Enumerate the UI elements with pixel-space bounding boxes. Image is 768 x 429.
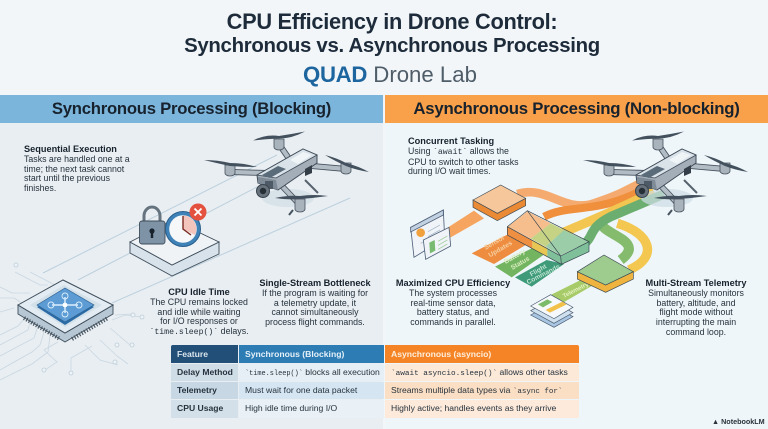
text: sequential execution: start until the previous [24, 173, 110, 183]
row: telemetry: Streams multiple data types via `async for` [391, 385, 562, 396]
text: maximized CPU efficiency: real-time sensor data, [410, 298, 496, 308]
text: single-stream bottleneck: If the program is waiting for [262, 288, 368, 298]
label: sensor updates: Updates [487, 240, 514, 259]
label: sensor updates [472, 234, 526, 264]
text: concurrent tasking: Using `await` allows the [408, 146, 509, 157]
icon: app windows [411, 210, 451, 259]
row: CPU usage: Highly active; handles events as they arrive [391, 403, 556, 413]
text: maximized CPU efficiency: commands in parallel. [410, 317, 496, 327]
icon: upper processing block [473, 185, 526, 221]
logo: QUAD Drone Lab: QUAD Drone Lab [303, 62, 477, 87]
panel: asynchronous processing [385, 95, 768, 429]
heading: synchronous [0, 95, 383, 123]
row: telemetry: Telemetry [177, 385, 217, 395]
icon: platform with lock and clock [130, 204, 219, 276]
text: maximized CPU efficiency: Maximized CPU Efficiency [396, 278, 510, 288]
title: CPU Efficiency in Drone Control: [227, 9, 557, 34]
text: multi-stream telemetry: flight mode without [659, 307, 733, 317]
text: single-stream bottleneck: cannot simultaneously [271, 307, 359, 317]
row: delay method: Delay Method [177, 367, 233, 377]
panel: synchronous processing [0, 95, 383, 429]
text: multi-stream telemetry: Simultaneously monitors [648, 288, 744, 298]
icon: central processing block [507, 211, 589, 264]
comparison table [171, 345, 579, 418]
text: concurrent tasking: during I/O wait times. [408, 166, 491, 176]
text: single-stream bottleneck: process flight commands. [265, 317, 365, 327]
text: CPU idle time: and idle while waiting [157, 307, 241, 317]
label: flight commands: Flight [529, 263, 549, 278]
row: CPU usage: CPU Usage [177, 403, 223, 413]
label: sensor updates: Sensor [483, 234, 507, 252]
text: maximized CPU efficiency [396, 278, 510, 327]
text: sequential execution: finishes. [24, 183, 56, 193]
heading: synchronous: Synchronous Processing (Blocking) [52, 99, 331, 118]
icon: CPU chip [18, 280, 113, 342]
text: CPU idle time: CPU Idle Time [168, 287, 230, 297]
watermark: NotebookLM: ▲ NotebookLM [712, 417, 765, 426]
circuit traces [0, 272, 142, 380]
icon: telemetry block [577, 255, 633, 292]
text: CPU idle time [149, 287, 249, 337]
table header row: Feature [177, 349, 208, 359]
table header row [171, 345, 579, 363]
text: CPU idle time: The CPU remains locked [150, 297, 248, 307]
label: flight commands: Commands [526, 263, 561, 286]
label: flight commands [515, 260, 564, 287]
row: delay method: `time.sleep()` blocks all execution [245, 367, 380, 378]
row: CPU usage [171, 400, 579, 418]
text: maximized CPU efficiency: battery status, and [417, 307, 489, 317]
text: CPU idle time: `time.sleep()` delays. [149, 326, 249, 337]
text: concurrent tasking [408, 136, 518, 176]
heading: asynchronous [385, 95, 768, 123]
text: sequential execution [24, 144, 130, 193]
table header row: Asynchronous (asyncio) [391, 349, 491, 359]
icon: drone [583, 132, 748, 215]
text: concurrent tasking: Concurrent Tasking [408, 136, 494, 146]
text: single-stream bottleneck [259, 278, 371, 327]
row: delay method: `await asyncio.sleep()` allows other tasks [391, 367, 568, 378]
text: multi-stream telemetry [646, 278, 746, 337]
row: telemetry: Must wait for one data packet [245, 385, 357, 395]
text: sequential execution: Sequential Execution [24, 144, 117, 154]
title: Synchronous vs. Asynchronous Processing [184, 35, 600, 57]
illustration: blocking pipeline [0, 132, 369, 380]
icon: drone [204, 132, 369, 215]
stream: telemetry: Telemetry [562, 281, 590, 300]
row: telemetry [171, 382, 579, 399]
title [184, 9, 600, 57]
text: multi-stream telemetry: Multi-Stream Telemetry [646, 278, 746, 288]
text: multi-stream telemetry: interrupting the main [656, 317, 736, 327]
text: sequential execution: Tasks are handled one at a [24, 154, 130, 164]
text: maximized CPU efficiency: The system processes [409, 288, 497, 298]
text: multi-stream telemetry: command loop. [666, 327, 726, 337]
text: multi-stream telemetry: battery, altitude, and [656, 298, 736, 308]
label: battery status: Status [510, 255, 531, 272]
text: single-stream bottleneck: a telemetry update, it [274, 298, 356, 308]
text: sequential execution: time; the next task cannot [24, 164, 124, 174]
label: battery status: Battery [503, 248, 527, 266]
row: CPU usage: High idle time during I/O [245, 403, 337, 413]
heading: asynchronous: Asynchronous Processing (Non-blocking) [413, 99, 740, 118]
text: concurrent tasking: CPU to switch to other tasks [408, 157, 518, 167]
icon: document stack [531, 295, 573, 327]
table header row: Synchronous (Blocking) [245, 349, 344, 359]
stream: telemetry [547, 280, 592, 305]
illustration: concurrent streams [410, 132, 748, 328]
row: delay method [171, 364, 579, 381]
text: single-stream bottleneck: Single-Stream Bottleneck [259, 278, 371, 288]
label: battery status [495, 248, 543, 277]
text: CPU idle time: for I/O responses or [160, 316, 238, 326]
